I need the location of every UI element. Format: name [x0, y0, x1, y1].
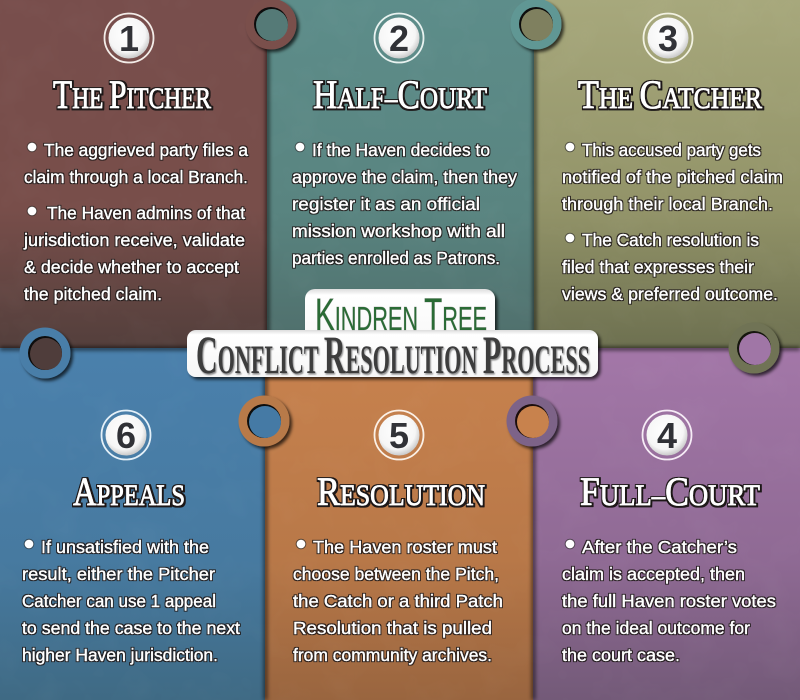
text: pitcher body: & decide whether to accept: [24, 257, 239, 277]
text: half-court body: [292, 140, 517, 268]
badge: number 2: 2: [389, 18, 409, 59]
text: pitcher body: [23, 140, 248, 304]
text: half-court body: register it as an official: [292, 194, 480, 214]
badge: number 4: 4: [657, 415, 677, 456]
text: resolution body: Resolution that is pulled: [293, 618, 492, 638]
text: resolution body: choose between the Pitch,: [293, 564, 499, 584]
text: half-court body: approve the claim, then they: [292, 167, 517, 187]
text: half-court body: parties enrolled as Patrons.: [292, 248, 500, 268]
badge: number 6: 6: [116, 415, 136, 456]
panel: 5 Resolution: [265, 348, 534, 700]
ring: orange tab over blue: [238, 396, 290, 446]
text: resolution body: the Catch or a third Patch: [293, 591, 503, 611]
heading: Appeals: APPEALS: [73, 469, 185, 514]
panel: 6 Appeals: [0, 348, 266, 700]
ring: olive tab over purple: [728, 322, 780, 374]
heading: The Pitcher: THE PITCHER: [53, 72, 211, 117]
text: full-court body: the court case.: [562, 645, 680, 665]
badge: number 2: [374, 14, 424, 62]
text: pitcher body: The Haven admins of that: [47, 203, 245, 223]
text: catcher body: This accused party gets: [582, 140, 761, 160]
title banner: [187, 289, 598, 385]
text: full-court body: claim is accepted, then: [562, 564, 745, 584]
badge: number 3: [644, 14, 692, 62]
text: catcher body: filed that expresses their: [562, 257, 754, 277]
text: appeals body: higher Haven jurisdiction.: [22, 645, 218, 665]
title: Kindren Tree: KINDREN TREE: [315, 289, 487, 340]
text: resolution body: [293, 537, 503, 665]
ring: brown tab over teal: [246, 0, 296, 50]
panel: 3 The Catcher: [534, 0, 800, 349]
panel: 4 Full-Court: [533, 348, 800, 700]
heading: Resolution: RESOLUTION: [317, 469, 485, 514]
badge: number 1: 1: [119, 18, 139, 59]
ring: purple tab over orange: [506, 396, 558, 446]
ring: blue tab over brown: [20, 328, 70, 378]
ring: teal tab over olive: [510, 0, 562, 50]
badge: number 4: [642, 410, 692, 460]
text: catcher body: [562, 140, 783, 304]
heading: Full-Court: FULL–COURT: [580, 469, 760, 514]
text: pitcher body: jurisdiction receive, validate: [23, 230, 245, 250]
text: catcher body: through their local Branch.: [562, 194, 773, 214]
heading: The Catcher: THE CATCHER: [578, 72, 762, 117]
badge: number 1: [104, 14, 154, 62]
text: half-court body: If the Haven decides to: [312, 140, 490, 160]
text: catcher body: notified of the pitched claim: [562, 167, 783, 187]
text: full-court body: [562, 537, 776, 665]
text: full-court body: on the ideal outcome for: [562, 618, 750, 638]
text: appeals body: result, either the Pitcher: [22, 564, 215, 584]
text: full-court body: After the Catcher’s: [582, 537, 737, 557]
panel: 1 The Pitcher: [0, 0, 268, 349]
text: appeals body: [22, 537, 240, 665]
text: catcher body: The Catch resolution is: [582, 230, 759, 250]
text: pitcher body: The aggrieved party files a: [44, 140, 248, 160]
text: resolution body: from community archives.: [293, 645, 492, 665]
badge: number 6: [102, 410, 150, 460]
badge: number 5: [374, 410, 424, 460]
badge: number 3: 3: [658, 18, 678, 59]
title: Conflict Resolution Process: CONFLICT RESOLUTION PROCESS: [196, 325, 590, 385]
badge: number 5: 5: [389, 415, 409, 456]
heading: Half-Court: HALF–COURT: [313, 72, 487, 117]
text: pitcher body: the pitched claim.: [24, 284, 162, 304]
text: pitcher body: claim through a local Branch.: [24, 167, 248, 187]
panel: 2 Half-Court: [267, 0, 535, 349]
text: appeals body: Catcher can use 1 appeal: [22, 591, 216, 611]
text: catcher body: views & preferred outcome.: [562, 284, 778, 304]
text: half-court body: mission workshop with all: [292, 221, 505, 241]
text: appeals body: If unsatisfied with the: [41, 537, 209, 557]
text: appeals body: to send the case to the next: [22, 618, 240, 638]
text: full-court body: the full Haven roster votes: [562, 591, 776, 611]
text: resolution body: The Haven roster must: [313, 537, 497, 557]
